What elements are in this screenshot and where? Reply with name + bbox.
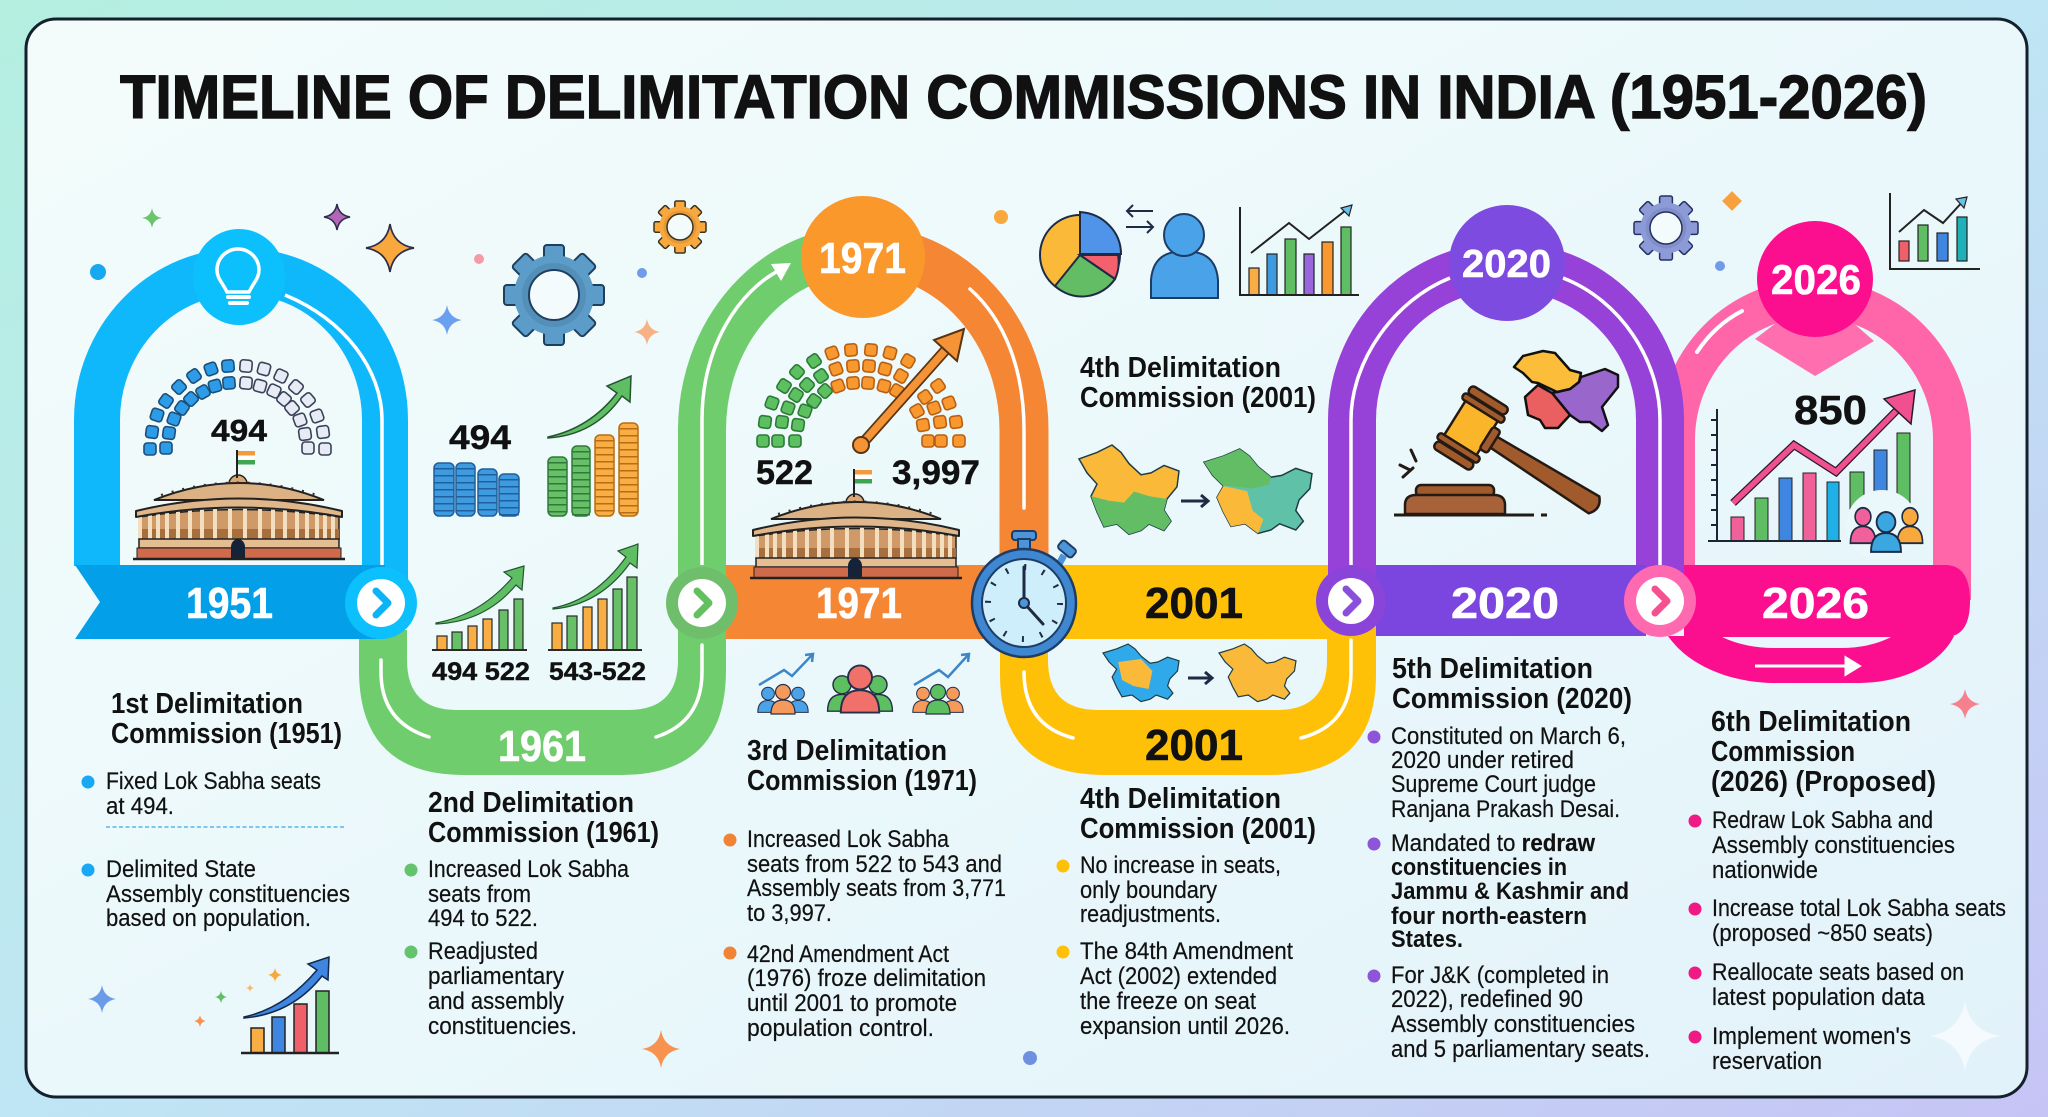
panel text: 3rd commission: seats from 522 to 543 and: [747, 851, 1002, 878]
panel text: 3rd commission: Increased Lok Sabha: [747, 826, 950, 853]
panel text: 3rd commission: population control.: [747, 1015, 934, 1042]
chevron: 1951 to 1961: [345, 567, 417, 639]
panel text: 2nd commission: 494 to 522.: [428, 905, 538, 932]
panel text: 4th commission: Commission (2001): [1080, 813, 1316, 845]
decorative sparkles and dots: [88, 191, 2000, 1071]
year label: 1951: 1951: [186, 579, 273, 628]
panel text: 2nd commission: Readjusted: [428, 938, 538, 965]
number: 494 in arch: 494: [211, 413, 268, 448]
icon: pie chart: [1040, 212, 1121, 296]
panel text: 5th commission: Mandated to redraw: [1391, 830, 1595, 857]
icon: parliament 1971: [750, 469, 962, 578]
panel text: 5th commission: 2020 under retired: [1391, 747, 1574, 774]
panel text: 6th commission: Assembly constituencies: [1712, 832, 1955, 859]
panel text: 2nd commission: seats from: [428, 881, 531, 908]
panel: 2026 track: [1668, 221, 1970, 683]
year label: 1971 band: 1971: [816, 579, 902, 628]
chevron: 2020 to 2026: [1624, 565, 1696, 637]
panel text: 5th commission: four north-eastern: [1391, 903, 1587, 930]
panel: 1961 track: [359, 250, 863, 775]
panel text: 4th commission: readjustments.: [1080, 901, 1221, 928]
panel text: 6th commission: [1688, 706, 2006, 1075]
icon: parliament 1951: [133, 450, 345, 559]
panel text: 2nd commission: Commission (1961): [428, 817, 659, 849]
heading: 4th commission upper: 4th Delimitation: [1080, 352, 1281, 384]
arrow: stack growth: [548, 376, 631, 438]
chevron: 1961 to 1971: [666, 567, 738, 639]
panel text: 6th commission: Implement women's: [1712, 1023, 1911, 1050]
panel text: 5th commission: constituencies in: [1391, 854, 1567, 881]
heading: 4th commission upper: [1080, 352, 1316, 414]
panel: 1951 track: [75, 229, 385, 639]
panel text: 3rd commission: 42nd Amendment Act: [747, 941, 949, 968]
chart: bars with trend: [1240, 205, 1359, 295]
chart: 2026 rising seats: [1708, 390, 1923, 560]
panel text: 5th commission: [1368, 653, 1650, 1063]
panel text: 2nd commission: 2nd Delimitation: [428, 787, 634, 819]
panel text: 4th commission: expansion until 2026.: [1080, 1013, 1290, 1040]
panel text: 3rd commission: 3rd Delimitation: [747, 735, 947, 767]
panel text: 5th commission: Assembly constituencies: [1391, 1011, 1635, 1038]
panel: 2001 track: [1000, 565, 1376, 775]
year label: 2001 curve: 2001: [1145, 721, 1243, 770]
badge: 1971 circle: 1971: [819, 234, 906, 283]
badge: 1971 circle: [801, 196, 925, 318]
icon: J&K map, 2020: [1514, 351, 1618, 431]
panel text: 5th commission: Constituted on March 6,: [1391, 723, 1626, 750]
badge: 2026 circle: [1757, 221, 1873, 337]
panel text: 4th commission: No increase in seats,: [1080, 852, 1281, 879]
number: 3,997: 3,997: [892, 454, 980, 492]
icon: people group: [1850, 508, 1923, 552]
panel text: 4th commission: Act (2002) extended: [1080, 963, 1277, 990]
seat arc: 494 seats: [144, 359, 331, 455]
chevron: 2001 to 2020: [1316, 566, 1386, 636]
panel text: 6th commission: reservation: [1712, 1048, 1822, 1075]
panel text: 2nd commission: parliamentary: [428, 963, 564, 990]
panel text: 3rd commission: until 2001 to promote: [747, 990, 957, 1017]
badge: 2020 circle: [1449, 205, 1565, 321]
arrow: 543 growth: [553, 544, 638, 609]
year label: 2026: 2026: [1762, 579, 1869, 628]
panel text: 3rd commission: Commission (1971): [747, 765, 977, 797]
panel text: 5th commission: Ranjana Prakash Desai.: [1391, 796, 1620, 823]
panel text: 5th commission: Jammu & Kashmir and: [1391, 878, 1629, 905]
chart: top-right mini bars: [1890, 193, 1980, 269]
panel text: 1st commission: Assembly constituencies: [106, 881, 350, 908]
arrows: exchange: [1126, 205, 1153, 233]
icon: periwinkle gear: [1634, 196, 1698, 260]
panel text: 3rd commission: (1976) froze delimitation: [747, 965, 986, 992]
icon: lightbulb badge: [193, 229, 285, 325]
panel text: 5th commission: For J&K (completed in: [1391, 962, 1609, 989]
panel text: 6th commission: nationwide: [1712, 857, 1818, 884]
chart: 543-522 bars: [548, 544, 642, 650]
title: TIMELINE OF DELIMITATION COMMISSIONS IN INDIA (1951-2026): [120, 63, 1927, 131]
icon: J&K map, below band: [1103, 644, 1296, 702]
panel text: 5th commission: and 5 parliamentary seats.: [1391, 1036, 1650, 1063]
panel text: 6th commission: Reallocate seats based on: [1712, 959, 1964, 986]
panel text: 1st commission: at 494.: [106, 793, 174, 820]
panel text: 5th commission: 2022), redefined 90: [1391, 986, 1583, 1013]
chart: bottom-left rising bars: [194, 957, 339, 1053]
arrow: green arch head: [771, 263, 791, 281]
arrow: gauge needle: [853, 329, 964, 453]
icon: gavel: [1394, 384, 1617, 539]
panel text: 1st commission: [82, 688, 350, 932]
year label: 2001 band: 2001: [1145, 579, 1243, 628]
panel text: 1st commission: Delimited State: [106, 856, 256, 883]
panel text: 1st commission: based on population.: [106, 905, 311, 932]
panel text: 6th commission: (proposed ~850 seats): [1712, 920, 1933, 947]
panel text: 3rd commission: Assembly seats from 3,771: [747, 875, 1006, 902]
icon: stopwatch: [972, 531, 1077, 657]
badge: 2026 circle: 2026: [1771, 256, 1861, 303]
arrow: 2026 band: [1755, 658, 1859, 674]
panel text: 2nd commission: Increased Lok Sabha: [428, 856, 630, 883]
year label: 1961: 1961: [498, 722, 586, 771]
icon: people row: [758, 654, 969, 714]
number: 522: 522: [756, 454, 813, 492]
icon: person: [1151, 214, 1218, 298]
chart: coin stacks 494: 494: [449, 419, 511, 457]
panel text: 5th commission: Commission (2020): [1392, 683, 1632, 715]
panel text: 1st commission: Commission (1951): [111, 718, 342, 750]
number: 850: 850: [1794, 387, 1867, 433]
panel text: 4th commission: 4th Delimitation: [1080, 783, 1281, 815]
panel text: 6th commission: Increase total Lok Sabha seats: [1712, 895, 2006, 922]
heading: 4th commission upper: Commission (2001): [1080, 382, 1316, 414]
icon: J&K map with split, above band: [1079, 445, 1312, 534]
panel text: 4th commission: the freeze on seat: [1080, 988, 1256, 1015]
label: 543-522: 543-522: [549, 658, 646, 686]
panel text: 6th commission: latest population data: [1712, 984, 1926, 1011]
panel text: 6th commission: 6th Delimitation: [1711, 706, 1911, 738]
panel text: 2nd commission: and assembly: [428, 988, 564, 1015]
panel text: 6th commission: Redraw Lok Sabha and: [1712, 807, 1933, 834]
label: 494 522: 494 522: [432, 658, 530, 686]
panel text: 1st commission: 1st Delimitation: [111, 688, 303, 720]
year label: 2020: 2020: [1451, 579, 1559, 628]
panel text: 4th commission: only boundary: [1080, 877, 1217, 904]
panel text: 4th commission: The 84th Amendment: [1080, 938, 1293, 965]
arrow: 494 to 522 growth: [436, 566, 524, 624]
icon: large gear: [504, 245, 604, 345]
panel text: 2nd commission: [404, 787, 659, 1040]
chart: 494 to 522 bars: [432, 566, 527, 650]
badge: 2020 circle: 2020: [1462, 243, 1551, 286]
panel text: 4th commission: [1056, 783, 1316, 1040]
panel: 1971 track: [720, 250, 1024, 639]
seat arc: 1971 seats: [757, 343, 965, 447]
panel text: 3rd commission: [724, 735, 1006, 1042]
panel text: 1st commission: Fixed Lok Sabha seats: [106, 768, 321, 795]
panel text: 2nd commission: constituencies.: [428, 1013, 577, 1040]
panel text: 5th commission: 5th Delimitation: [1392, 653, 1593, 685]
panel text: 6th commission: (2026) (Proposed): [1711, 766, 1936, 798]
chart: coin stacks 494: [434, 376, 638, 516]
panel text: 3rd commission: to 3,997.: [747, 900, 832, 927]
panel: 2020 track: [1351, 205, 1660, 636]
panel text: 5th commission: States.: [1391, 926, 1463, 953]
panel text: 5th commission: Supreme Court judge: [1391, 771, 1596, 798]
panel text: 6th commission: Commission: [1711, 736, 1855, 768]
icon: orange gear: [654, 201, 706, 253]
